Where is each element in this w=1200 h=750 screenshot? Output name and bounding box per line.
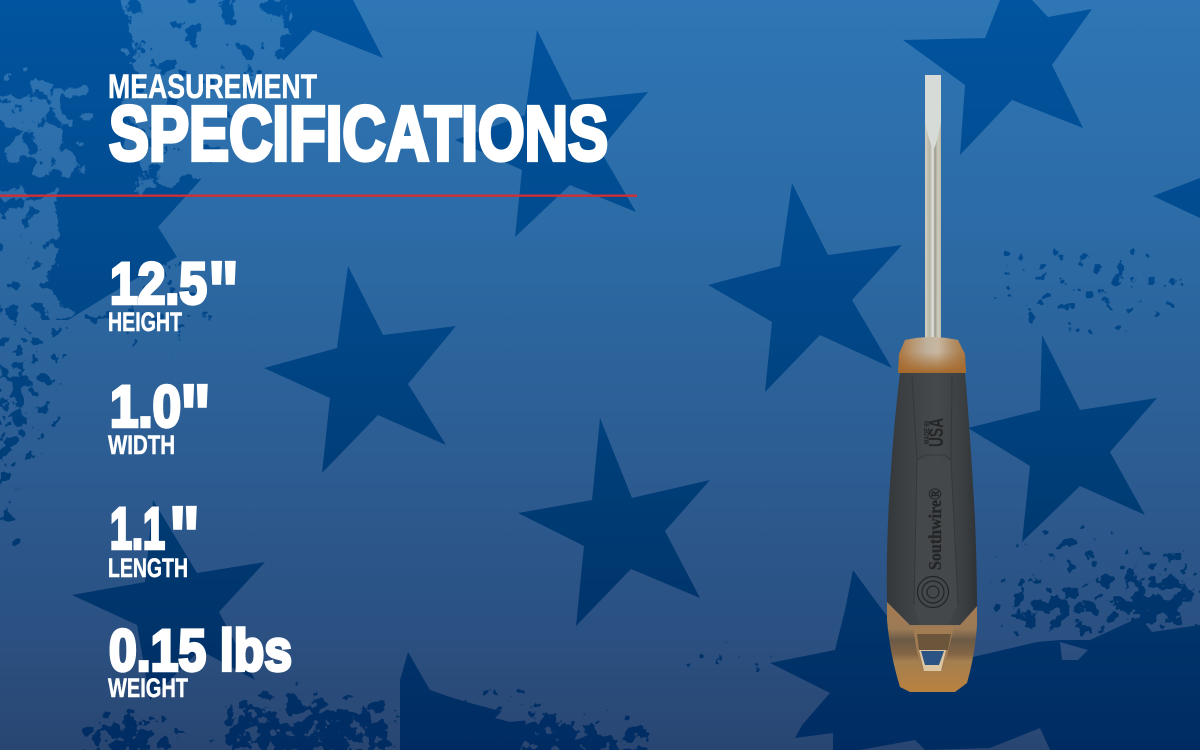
star: bottom center [400, 652, 530, 750]
value: 0.15 lbs [109, 618, 292, 684]
grunge texture: light erosion [0, 0, 293, 338]
patch: bottom center [495, 704, 530, 722]
patch: band notch [1060, 642, 1088, 660]
heading: specifications: SPECIFICATIONS [109, 91, 608, 177]
star: large left [0, 0, 262, 320]
patch: lower right edge [1180, 600, 1200, 627]
hanging hole [913, 627, 954, 671]
star: right of center [708, 183, 902, 392]
grip [887, 373, 977, 625]
spec: height [108, 245, 239, 340]
label: HEIGHT [108, 307, 182, 337]
amber base [887, 602, 977, 692]
grip facets [912, 376, 958, 605]
made in usa mark [924, 418, 948, 447]
light patches in bottom band [495, 600, 1200, 722]
star: behind title [455, 30, 648, 237]
screwdriver [887, 75, 977, 692]
brand name: Southwire® [925, 488, 945, 570]
usa: USA [926, 418, 948, 447]
value: 1.0 [110, 374, 181, 440]
hole opening [921, 651, 944, 665]
shaft [925, 100, 941, 342]
label: LENGTH [108, 553, 188, 583]
star: bottom left [72, 500, 265, 700]
hole frame [913, 627, 954, 670]
heading: measurement: MEASUREMENT [108, 68, 317, 106]
value: 1.1 [110, 496, 165, 562]
star: bottom right with band [770, 570, 1200, 750]
value: 12.5 [110, 252, 207, 316]
blade tip [925, 75, 941, 148]
inner shadow block [917, 634, 951, 650]
star: top left [250, 0, 383, 72]
star: middle left [264, 266, 456, 473]
grunge texture: dark flecks [0, 226, 1200, 750]
collar base tint [898, 352, 966, 373]
hole surround [919, 650, 946, 671]
label: WEIGHT [108, 673, 188, 703]
collar [898, 337, 966, 373]
inch mark: " [208, 245, 239, 340]
star: far right edge [1153, 178, 1200, 218]
logo rings [918, 576, 948, 608]
spec: length [108, 490, 200, 585]
title [108, 68, 608, 177]
made in: MADE IN [924, 421, 931, 444]
inch mark: " [169, 490, 200, 585]
star: top right [903, 0, 1092, 155]
red divider [0, 194, 637, 197]
inch mark: " [180, 368, 211, 463]
spec: weight [108, 618, 292, 703]
spec: width [108, 368, 211, 463]
brand logo [918, 576, 948, 608]
star: lower right [968, 335, 1157, 542]
label: WIDTH [108, 430, 175, 460]
star: center [518, 418, 710, 626]
grip panel [914, 460, 958, 625]
